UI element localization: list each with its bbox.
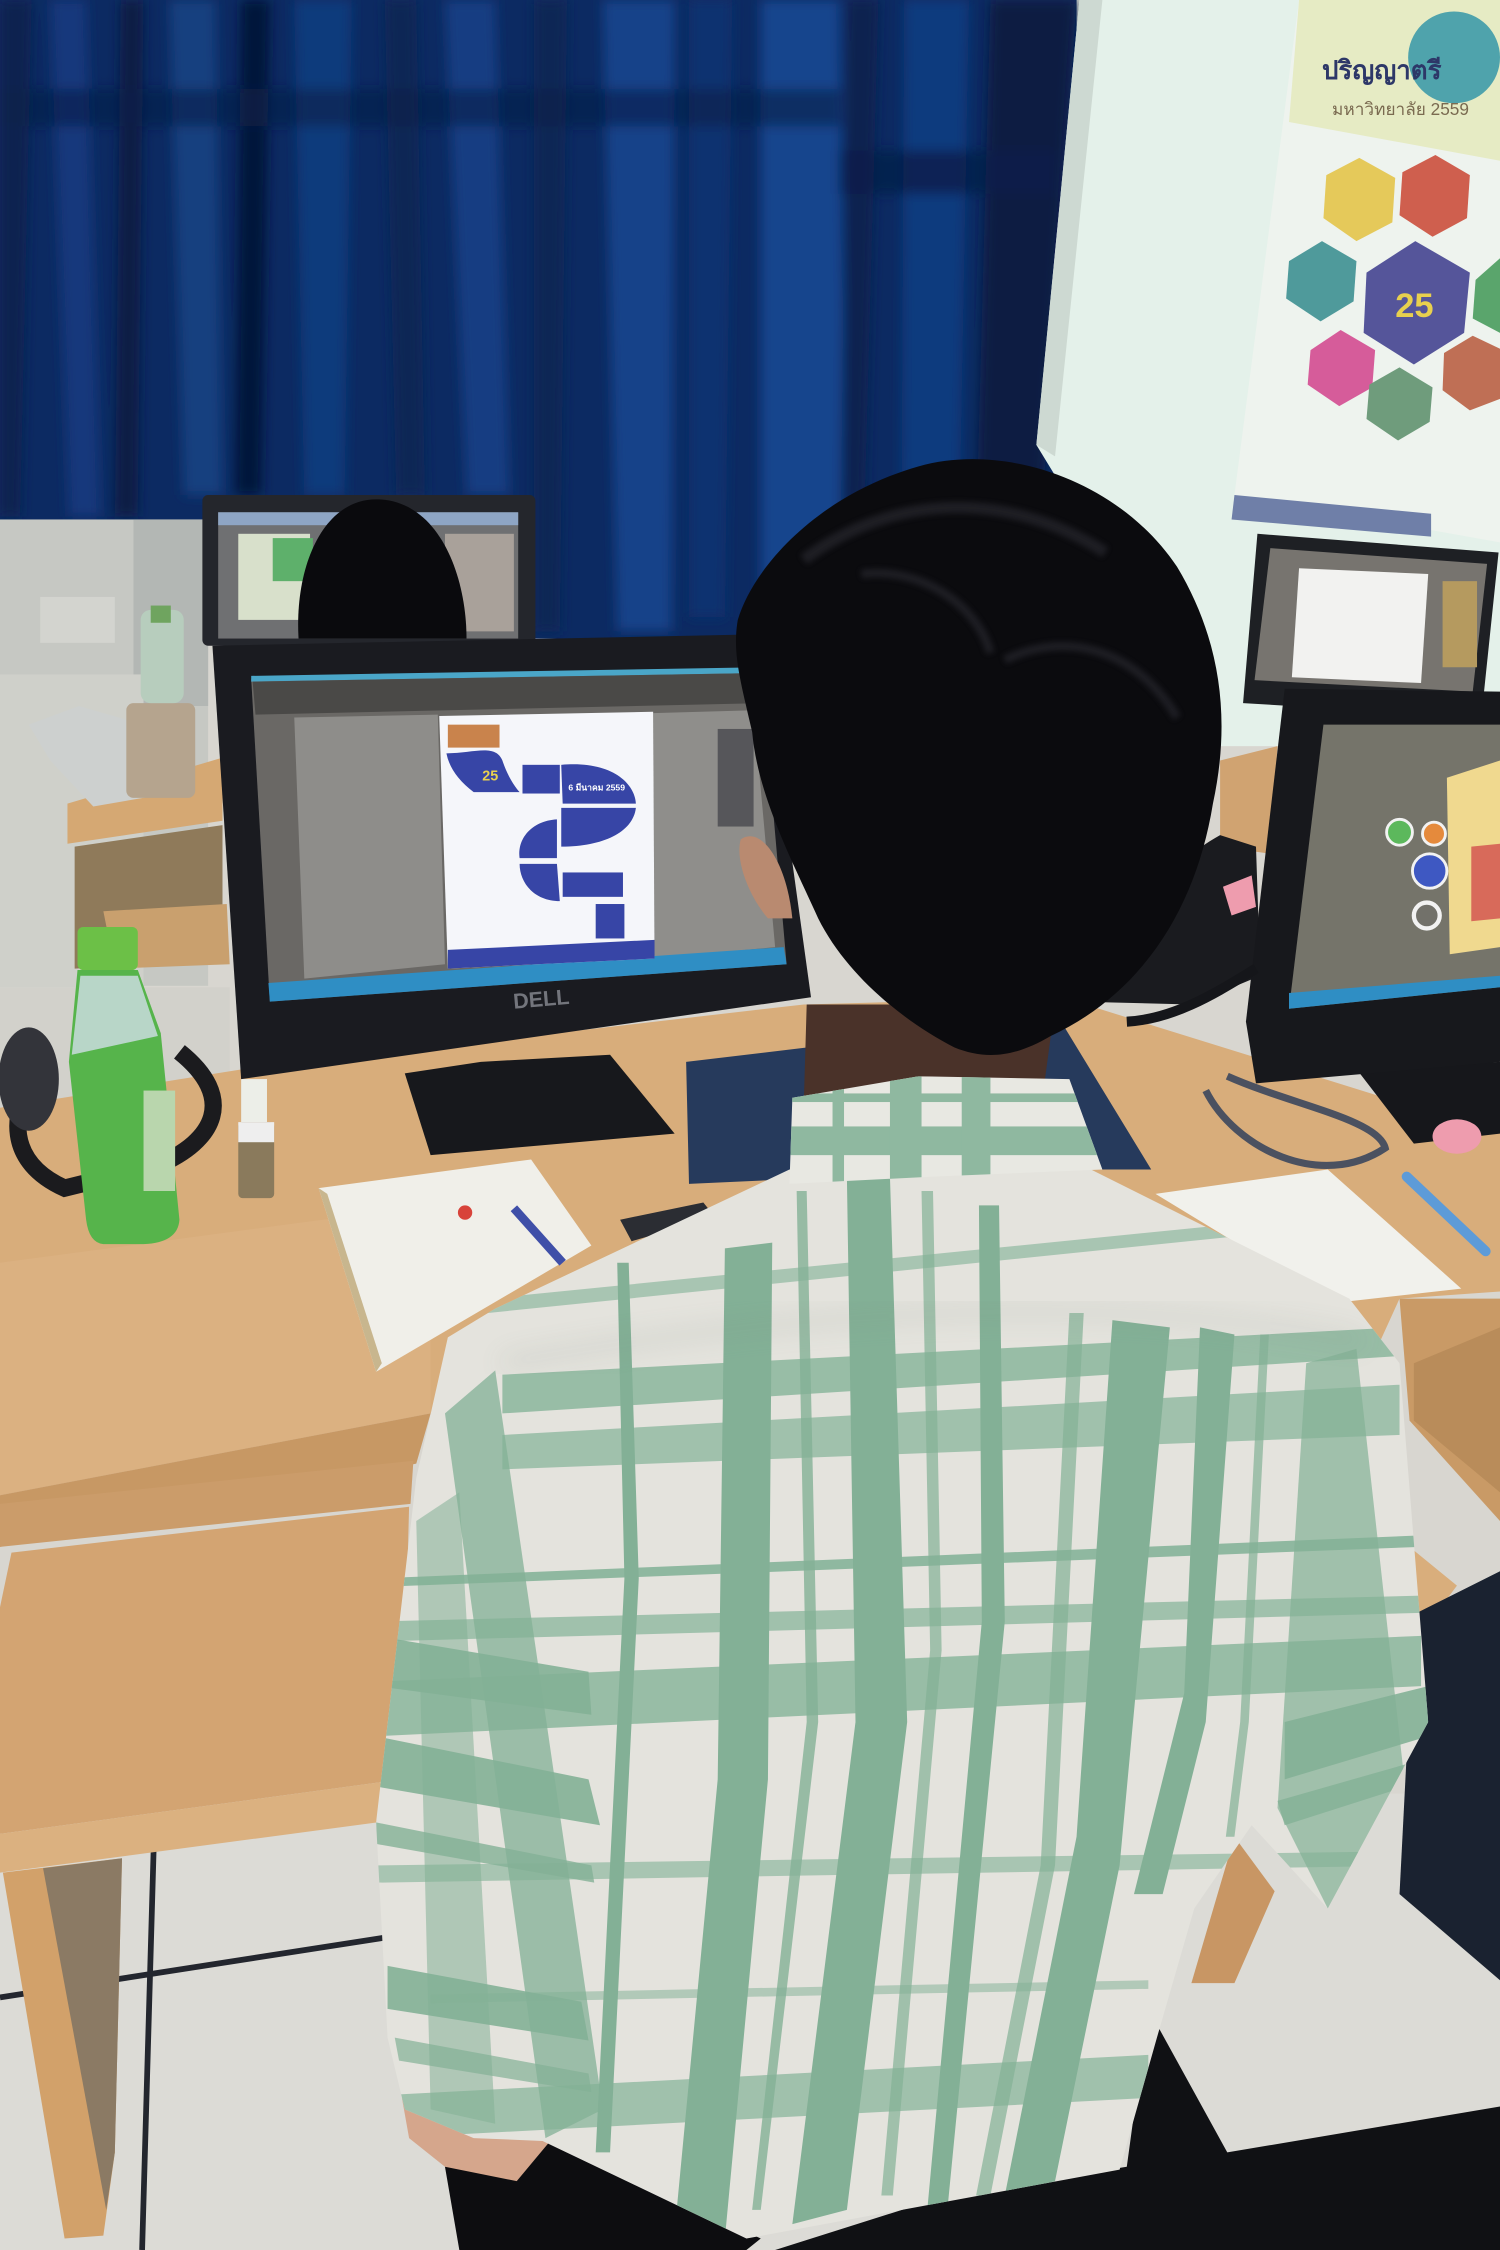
keyboard tray	[0, 1507, 409, 1834]
sleeve plaid: right	[1278, 1349, 1428, 1908]
book on the desk	[319, 1159, 591, 1372]
color swatches on screen	[1387, 819, 1447, 928]
shirt	[359, 1069, 1450, 2250]
artboard: 25	[482, 769, 498, 785]
denim bag on the desk	[686, 1004, 1151, 1184]
hair	[736, 459, 1222, 1055]
slide header	[1289, 0, 1500, 161]
floor	[0, 1794, 1500, 2250]
office chair	[445, 2009, 1500, 2250]
green bottle	[69, 927, 179, 1244]
slide footer	[1232, 495, 1431, 537]
vertical plaid bands	[596, 1177, 1269, 2239]
papers on the desk	[1156, 1169, 1461, 1303]
woman's hair behind monitor	[298, 499, 467, 639]
hand	[402, 2098, 553, 2181]
phone	[620, 1202, 715, 1241]
collar	[790, 1076, 1102, 1182]
monitor stand	[405, 1055, 675, 1155]
right front monitor	[1246, 689, 1500, 1144]
right desk structures	[1191, 746, 1500, 1983]
horizontal plaid bands	[376, 1213, 1421, 2138]
blue pen	[1407, 1177, 1486, 1251]
drawer front	[0, 1461, 413, 1547]
ear	[739, 836, 792, 918]
back small table and clutter	[29, 606, 230, 969]
curtain	[0, 0, 1077, 639]
DELL logo: DELL	[512, 985, 570, 1014]
headphones	[0, 1027, 213, 1188]
slide header: ปริญญาตรี	[1322, 56, 1442, 85]
shirt folds	[502, 1312, 1364, 1363]
black bag behind right monitor	[1077, 835, 1260, 1004]
slide hexagons	[1286, 155, 1500, 441]
main monitor	[212, 634, 811, 1155]
screen	[251, 667, 787, 1002]
sleeve plaid: left	[376, 1370, 603, 2138]
filing cabinet	[0, 519, 230, 1116]
pink figurines and cables	[1127, 875, 1481, 1165]
slide hexagons: 25	[1395, 287, 1434, 325]
small dropper bottle	[238, 1079, 274, 1198]
desk front edge	[0, 1413, 431, 1547]
right rear monitor	[1243, 534, 1499, 717]
neck	[804, 1004, 1055, 1102]
projection wall with slide	[1036, 0, 1500, 746]
back monitor	[202, 495, 535, 646]
right monitor stand	[1356, 1062, 1500, 1144]
main desk surface	[0, 997, 1500, 2239]
artboard	[439, 712, 655, 969]
artboard: 6 มีนาคม 2559	[568, 783, 625, 793]
slide header: มหาวิทยาลัย 2559	[1332, 99, 1469, 119]
desk leg left	[3, 1858, 122, 2239]
